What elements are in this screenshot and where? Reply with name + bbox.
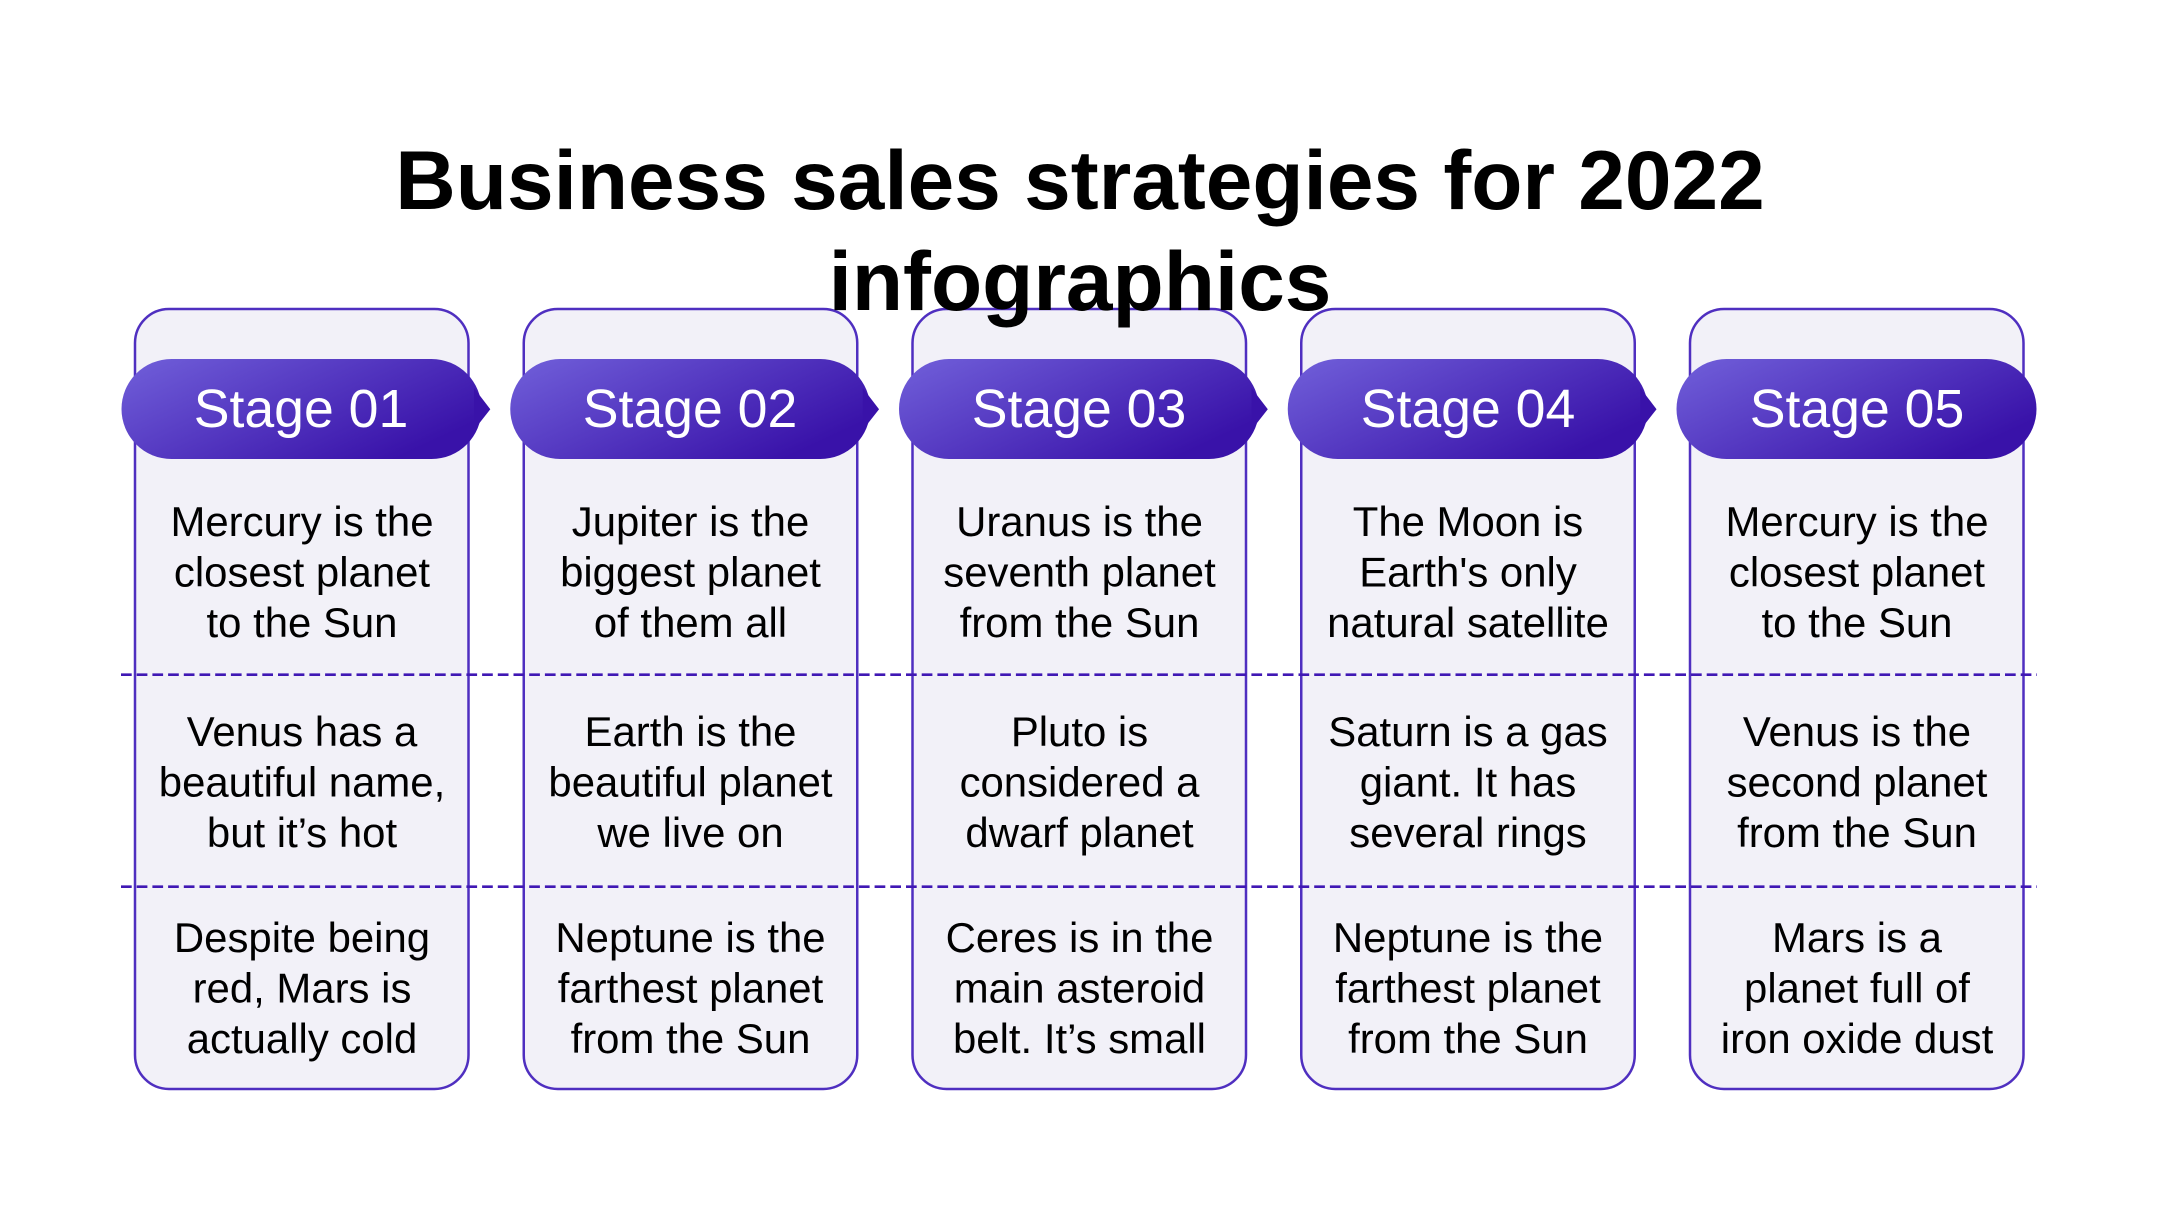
stage 04 row 3 text: farthest planet bbox=[1335, 964, 1601, 1012]
stage 01 row 3 text: red, Mars is bbox=[193, 964, 411, 1012]
stage 03 row 3 text: Ceres is in the bbox=[946, 914, 1213, 961]
stage 05 row 1 text: Mercury is the bbox=[1725, 498, 1989, 545]
stage 05 row 2 text: second planet bbox=[1727, 758, 1988, 806]
stage 01 row 2 text: beautiful name, bbox=[159, 758, 445, 806]
stage 03 row 3 text: main asteroid bbox=[954, 964, 1205, 1012]
title: Business sales strategies for 2022 bbox=[395, 133, 1765, 227]
stage 02 row 2 text: Earth is the bbox=[585, 708, 796, 755]
stage 03 header pill with arrow: Stage 03 bbox=[972, 379, 1186, 439]
panel: stage 02 card bbox=[524, 309, 857, 1089]
stage 02 header pill with arrow: Stage 02 bbox=[583, 379, 797, 439]
stage 02 row 1 text: of them all bbox=[594, 599, 787, 646]
stage 04 row 2 text: Saturn is a gas bbox=[1328, 708, 1608, 755]
stage 03 row 1 text: Uranus is the bbox=[956, 498, 1203, 545]
stage 03 header pill with arrow bbox=[899, 359, 1268, 459]
stage 03 row 2 text: Pluto is bbox=[1011, 708, 1148, 755]
title bbox=[395, 133, 1765, 328]
stage 02 row 2 text: beautiful planet bbox=[548, 758, 833, 806]
stage 02 row 3 text: from the Sun bbox=[571, 1015, 810, 1062]
stage 04 row 2 text: giant. It has bbox=[1360, 758, 1576, 806]
panel: stage 05 card bbox=[1690, 309, 2024, 1089]
stage 01 row 3 text: actually cold bbox=[187, 1015, 417, 1062]
stage 02 row 1 text: biggest planet bbox=[560, 548, 821, 596]
stage 04 row 3 text: from the Sun bbox=[1348, 1015, 1588, 1062]
panel: stage 04 card bbox=[1301, 309, 1635, 1089]
stage 05 header pill: Stage 05 bbox=[1750, 379, 1964, 439]
stage 01 header pill with arrow bbox=[122, 359, 490, 459]
stage 03 row 1 text: seventh planet bbox=[943, 548, 1216, 596]
stage 05 header pill bbox=[1676, 359, 2036, 459]
stage 04 row 3 text: Neptune is the bbox=[1333, 914, 1603, 961]
title: infographics bbox=[829, 234, 1331, 328]
stage 04 header pill with arrow bbox=[1288, 359, 1657, 459]
stage 02 header pill with arrow bbox=[510, 359, 879, 459]
stage 02 row 1 text: Jupiter is the bbox=[572, 498, 809, 545]
stage 01 row 2 text: Venus has a bbox=[187, 708, 418, 755]
stage 05 row 1 text: to the Sun bbox=[1762, 599, 1952, 646]
stage 01 row 1 text: Mercury is the bbox=[170, 498, 434, 545]
stage 02 row 2 text: we live on bbox=[596, 809, 784, 856]
stage 01 row 2 text: but it’s hot bbox=[207, 809, 397, 856]
stage 05 row 1 text: closest planet bbox=[1729, 548, 1985, 596]
panel: stage 03 card bbox=[912, 309, 1246, 1089]
stage 05 row 2 text: Venus is the bbox=[1743, 708, 1971, 755]
stage 02 row 3 text: farthest planet bbox=[558, 964, 824, 1012]
stage 01 row 1 text: to the Sun bbox=[207, 599, 397, 646]
panel: stage 01 card bbox=[135, 309, 468, 1089]
stage 03 row 2 text: considered a bbox=[960, 758, 1200, 806]
stage 03 row 1 text: from the Sun bbox=[960, 599, 1199, 646]
stage 03 row 2 text: dwarf planet bbox=[965, 809, 1194, 856]
stage 02 row 3 text: Neptune is the bbox=[555, 914, 826, 961]
stage 04 row 1 text: The Moon is bbox=[1353, 498, 1583, 545]
stage 03 row 3 text: belt. It’s small bbox=[953, 1015, 1206, 1062]
stage 05 row 2 text: from the Sun bbox=[1737, 809, 1977, 856]
stage 01 row 1 text: closest planet bbox=[174, 548, 430, 596]
stage 01 row 3 text: Despite being bbox=[174, 914, 430, 961]
stage 04 row 1 text: Earth's only bbox=[1359, 548, 1577, 596]
stage 04 row 2 text: several rings bbox=[1349, 809, 1587, 856]
stage 04 header pill with arrow: Stage 04 bbox=[1361, 379, 1575, 439]
stage 05 row 3 text: iron oxide dust bbox=[1721, 1015, 1994, 1062]
stage 04 row 1 text: natural satellite bbox=[1327, 599, 1609, 646]
stage 05 row 3 text: planet full of bbox=[1744, 964, 1970, 1012]
stage 05 row 3 text: Mars is a bbox=[1772, 914, 1943, 961]
stage 01 header pill with arrow: Stage 01 bbox=[194, 379, 408, 439]
